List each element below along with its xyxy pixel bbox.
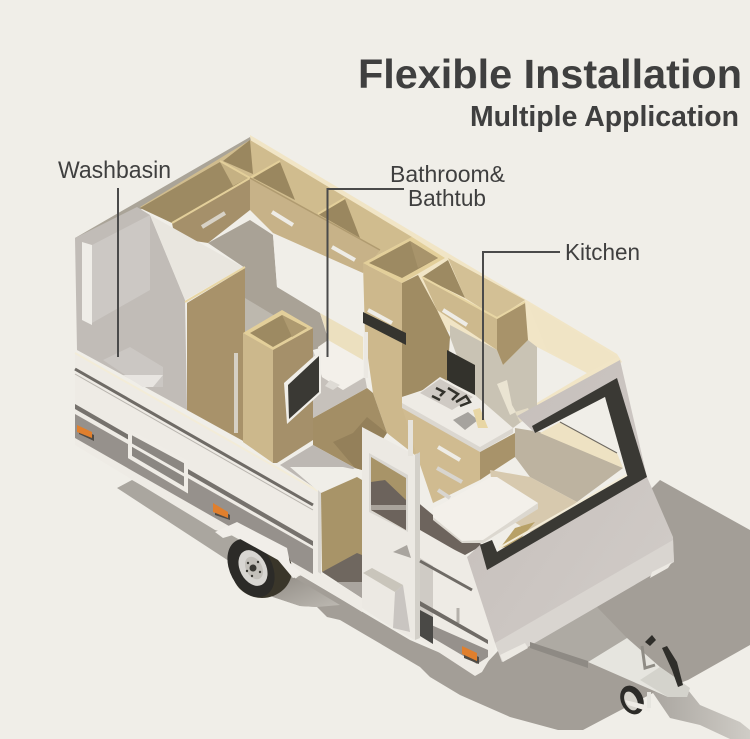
lower stripe bbox=[75, 404, 313, 546]
label: Kitchen: Kitchen bbox=[565, 239, 640, 265]
door window bbox=[369, 453, 408, 532]
jockey wheel bbox=[616, 682, 651, 718]
panel: tow hitch bbox=[530, 635, 690, 718]
mirror panel bbox=[92, 215, 150, 323]
hitch lever bbox=[642, 635, 683, 687]
panel: entry counter and opening bbox=[280, 445, 362, 598]
label: Bathroom& Bathtub: Bathtub bbox=[408, 185, 486, 211]
panel: rear floor and window bbox=[208, 220, 363, 363]
panel: overhead cabinets bbox=[140, 140, 412, 273]
panel: interior floor beyond door bbox=[415, 500, 483, 563]
panel: cream wall end bbox=[528, 303, 617, 373]
open top bbox=[363, 237, 445, 283]
lower band bbox=[495, 540, 674, 662]
back wall with cream rim bbox=[75, 135, 622, 428]
ground shadow bbox=[117, 480, 750, 739]
panel: body side upper bbox=[75, 352, 362, 612]
panel: entry door bbox=[362, 420, 420, 640]
sink bbox=[453, 412, 478, 430]
window frame bbox=[480, 378, 647, 570]
washbasin unit bbox=[103, 347, 163, 387]
panel: kitchen counter and lower cabinets bbox=[402, 377, 532, 503]
reflector bbox=[77, 425, 94, 441]
panel: road wheel bbox=[218, 531, 292, 605]
window sill fittings bbox=[497, 380, 516, 415]
panel: cab interior bbox=[490, 422, 623, 548]
tow bar bbox=[530, 642, 588, 668]
leader line: Kitchen bbox=[483, 252, 560, 420]
panel: partition and tall cabinet bbox=[150, 215, 245, 442]
door hinge post bbox=[408, 420, 413, 456]
tall face bbox=[363, 263, 432, 455]
room walls bbox=[75, 207, 187, 410]
view through window bbox=[560, 397, 617, 453]
hitch plate bbox=[588, 638, 690, 697]
panel: kitchen upper cabinets bbox=[363, 237, 528, 455]
upper rail bbox=[75, 369, 313, 505]
drawer 2 bbox=[250, 178, 380, 273]
counter top bbox=[402, 377, 513, 447]
label: Bathroom& Bathtub: Bathroom& bbox=[390, 161, 505, 187]
leader line: Bathroom bbox=[328, 189, 404, 357]
towel strip bbox=[82, 242, 92, 325]
reflector bbox=[213, 503, 230, 520]
black bar bbox=[363, 312, 406, 345]
panel: bed and seating bbox=[313, 332, 387, 470]
label: Bathroom& Bathtub bbox=[390, 161, 505, 211]
TV bbox=[284, 350, 321, 424]
stove bbox=[420, 379, 473, 410]
panel: washbasin room bbox=[75, 207, 187, 410]
drawer handles bbox=[438, 447, 460, 460]
label: Washbasin: Washbasin bbox=[58, 157, 171, 184]
panel: trailer nose bbox=[467, 360, 674, 662]
door step bbox=[363, 568, 403, 592]
side grille bbox=[130, 432, 186, 490]
panel: oven back bbox=[447, 350, 475, 397]
panel: wheel fender bbox=[215, 522, 302, 578]
door handle bbox=[393, 545, 411, 558]
subtitle: Multiple Application bbox=[470, 101, 739, 133]
panel: side body front bbox=[420, 530, 495, 676]
leader line: Washbasin bbox=[117, 188, 119, 357]
reflector bbox=[462, 646, 479, 664]
drawer 1 bbox=[172, 178, 250, 243]
panel: folding table bbox=[433, 477, 538, 543]
dark side face bbox=[402, 275, 450, 397]
panel: small cabinet with TV bbox=[243, 310, 321, 463]
end drawer bbox=[448, 258, 525, 318]
title: Flexible Installation bbox=[358, 51, 742, 97]
